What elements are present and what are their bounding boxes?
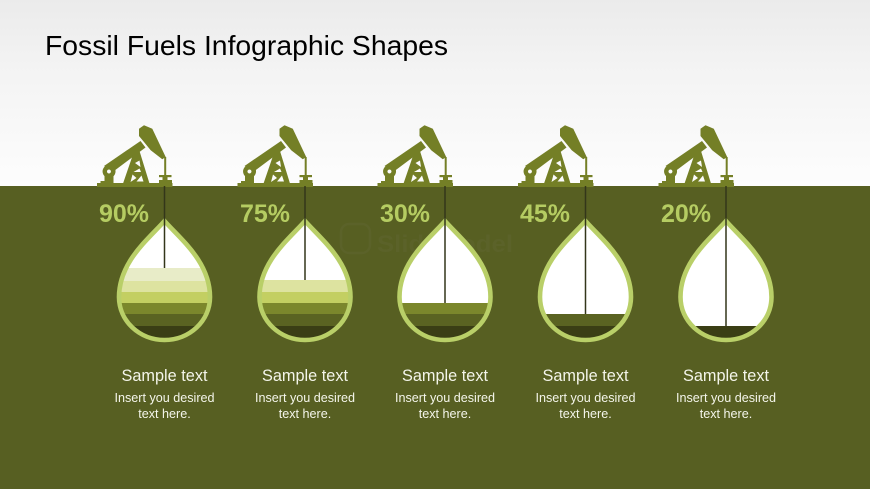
column: 90%	[97, 125, 215, 421]
caption: text here.	[559, 407, 612, 421]
caption: Insert you desired	[255, 391, 355, 405]
background sky	[0, 0, 870, 186]
caption: Sample text	[262, 367, 348, 385]
caption	[676, 367, 776, 421]
oil drop gauge	[114, 221, 214, 342]
oil drop gauge	[676, 221, 776, 342]
caption: Insert you desired	[535, 391, 636, 405]
caption: text here.	[138, 407, 191, 421]
percentage: 45%	[520, 200, 570, 228]
caption	[535, 367, 636, 421]
caption: Sample text	[402, 367, 488, 385]
percentage: 20%	[661, 200, 711, 228]
pipe	[444, 186, 446, 303]
percentage: 30%	[380, 200, 430, 228]
caption: Sample text	[683, 367, 769, 385]
caption: Insert you desired	[676, 391, 776, 405]
column: 75%	[238, 125, 355, 421]
title: Fossil Fuels Infographic Shapes	[45, 30, 448, 61]
pipe	[164, 186, 165, 268]
caption	[395, 367, 495, 421]
icon: pump jack	[658, 125, 734, 187]
ground	[0, 186, 870, 489]
caption: text here.	[419, 407, 471, 421]
caption: Sample text	[543, 367, 629, 385]
pipe	[725, 186, 727, 326]
icon: pump jack	[238, 125, 313, 187]
oil drop gauge	[395, 221, 495, 342]
oil drop gauge	[536, 221, 636, 342]
icon: pump jack	[518, 125, 594, 187]
icon: pump jack	[378, 125, 453, 187]
pipe	[304, 186, 306, 280]
caption: Insert you desired	[114, 391, 215, 405]
percentage: 75%	[240, 200, 290, 228]
column: 45%	[518, 125, 636, 421]
icon: pump jack	[97, 125, 172, 187]
caption	[255, 367, 355, 421]
watermark	[341, 224, 513, 258]
caption: text here.	[279, 407, 331, 421]
caption: text here.	[700, 407, 752, 421]
percentage: 90%	[99, 200, 149, 228]
pipe	[585, 186, 586, 314]
oil drop gauge	[255, 221, 355, 342]
caption: Insert you desired	[395, 391, 495, 405]
column: 30%	[378, 125, 495, 421]
watermark: SlideModel	[377, 231, 513, 258]
caption	[114, 367, 215, 421]
column: 20%	[658, 125, 776, 421]
caption: Sample text	[122, 367, 208, 385]
